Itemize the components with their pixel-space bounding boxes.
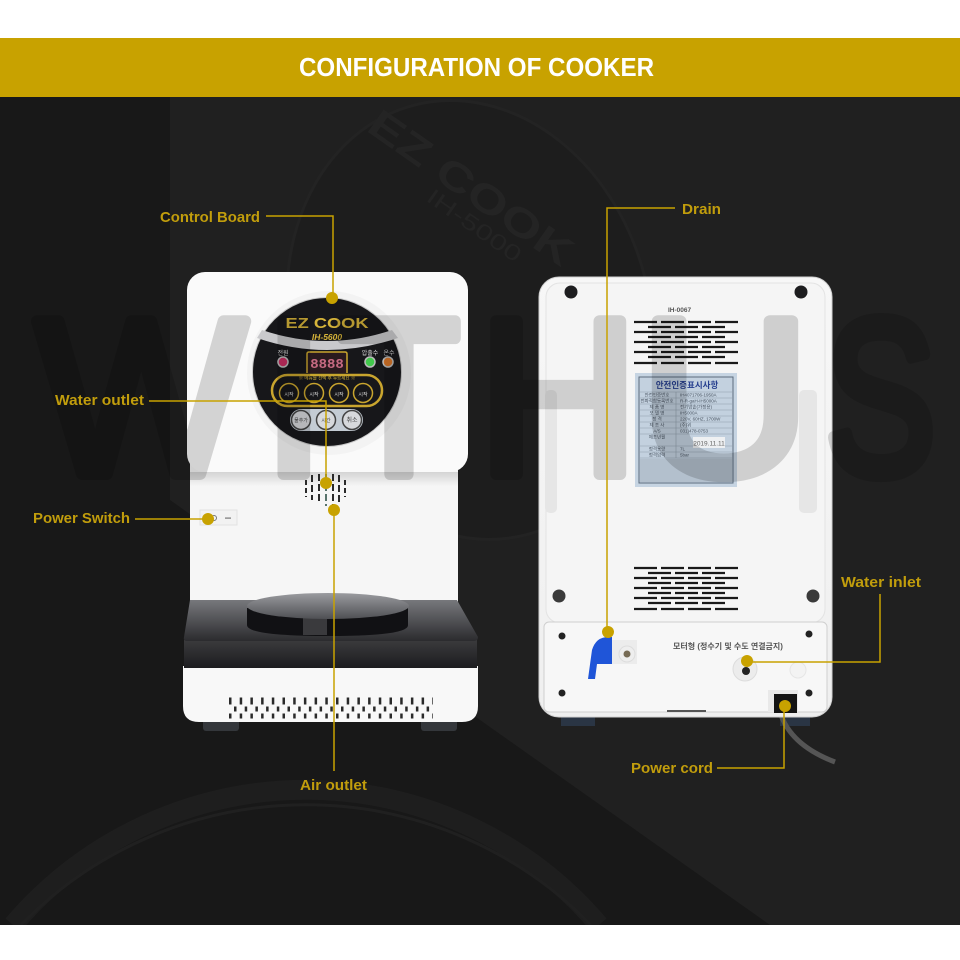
page background: IH-5000 (422, 184, 527, 267)
start buttons: 시작 (358, 391, 368, 398)
status lights (278, 357, 288, 367)
callout: control board (160, 209, 338, 304)
glass top (184, 600, 478, 641)
base vent (229, 701, 433, 716)
safety label: 안전인증표시사항 (656, 380, 718, 390)
title: CONFIGURATION OF COOKER (299, 52, 654, 82)
bottom vent (634, 568, 738, 609)
safety label: 전기밥솥(가정용) (680, 404, 712, 410)
safety label: 2019.11.11 (693, 440, 725, 448)
connection panel (544, 622, 827, 713)
callout: air outlet: Air outlet (300, 777, 367, 794)
callout: water outlet: Water outlet (55, 392, 144, 409)
watermark: W (36, 274, 246, 522)
safety label (635, 373, 737, 487)
speaker vent (306, 474, 345, 506)
water inlet port (733, 657, 806, 681)
callout: power cord: Power cord (631, 760, 713, 777)
watermark: T (338, 274, 460, 522)
safety label: R-R-gaH-IH5000A (680, 398, 717, 404)
start buttons (272, 374, 382, 406)
lower buttons (290, 409, 363, 431)
lower buttons: 물추가 (294, 417, 308, 424)
cooking disc (247, 593, 409, 636)
screw holes (552, 286, 820, 602)
top vent (634, 322, 738, 363)
control dial: 압출수 (362, 349, 379, 357)
display (307, 352, 347, 373)
safety label: 제 조 사 (650, 422, 665, 428)
rear feet (561, 714, 595, 726)
safety label: 5bar (680, 452, 690, 458)
safety label: IH4071706-1950A (680, 392, 717, 398)
safety label: 정격압력 (649, 452, 665, 458)
side grips (545, 390, 557, 513)
bottom white strip (0, 925, 960, 960)
safety label: IH5000A (680, 410, 698, 416)
safety label: 전파적합등록번호 (640, 398, 674, 404)
safety label: 220V, 60HZ, 1700W (680, 416, 721, 422)
safety label: 정격용량 (649, 446, 665, 452)
control dial: IH-5600 (312, 332, 342, 342)
control dial: 전원 (277, 349, 289, 357)
brand: EZ COOK (286, 315, 369, 332)
start buttons: 시작 (309, 391, 319, 398)
power cable (780, 712, 835, 762)
watermark (36, 274, 936, 522)
control dial: 온수 (383, 350, 395, 357)
lower buttons: 시간 (321, 417, 331, 424)
callout: air outlet (300, 504, 367, 794)
start buttons: 시작 (284, 391, 294, 398)
base dark band (184, 640, 477, 668)
callout: water inlet: Water inlet (841, 574, 921, 591)
drain valve (588, 637, 637, 679)
column body (190, 450, 458, 615)
callout: power cord (631, 700, 791, 777)
control dial (247, 291, 411, 455)
safety label: 7L (680, 446, 686, 452)
power switch (200, 510, 237, 525)
control dial: 8888 (310, 357, 344, 373)
connection panel: 모터형 (정수기 및 수도 연결금지) (673, 641, 783, 651)
safety label: 정 격 (652, 416, 662, 422)
start buttons: ※ 메뉴를 선택 후 누르세요 ※ (299, 374, 355, 382)
safety label: 안전인증번호 (645, 392, 669, 398)
watermark: I (263, 274, 325, 522)
callout: power switch: Power Switch (33, 510, 130, 527)
callout: control board: Control Board (160, 209, 260, 226)
safety label: 제조년월 (649, 434, 665, 440)
safety label: 제 품 명 (650, 404, 664, 410)
safety label: 031)478-0753 (680, 428, 709, 434)
serial number: IH-0067 (668, 307, 692, 314)
callout: water outlet (55, 392, 332, 489)
callout: water inlet (741, 574, 921, 667)
safety label: (주)위 (680, 422, 691, 428)
rear view of cooker (539, 277, 835, 762)
header band (0, 38, 960, 97)
callout: power switch (33, 510, 214, 527)
start buttons: 시작 (334, 391, 344, 398)
callout: drain (602, 201, 721, 638)
callout: drain: Drain (682, 201, 721, 218)
power socket (768, 690, 798, 713)
watermark: H (478, 274, 638, 522)
watermark: U (640, 274, 810, 522)
feet (203, 718, 239, 731)
top panel (187, 272, 468, 472)
base white housing (183, 666, 478, 722)
safety label: A/S (653, 428, 661, 434)
page background: EZ COOK (360, 101, 582, 275)
lower buttons: 취소 (346, 416, 358, 424)
front view of cooker (183, 272, 478, 731)
rear shell (539, 277, 832, 717)
safety label: 모 델 명 (650, 410, 664, 416)
